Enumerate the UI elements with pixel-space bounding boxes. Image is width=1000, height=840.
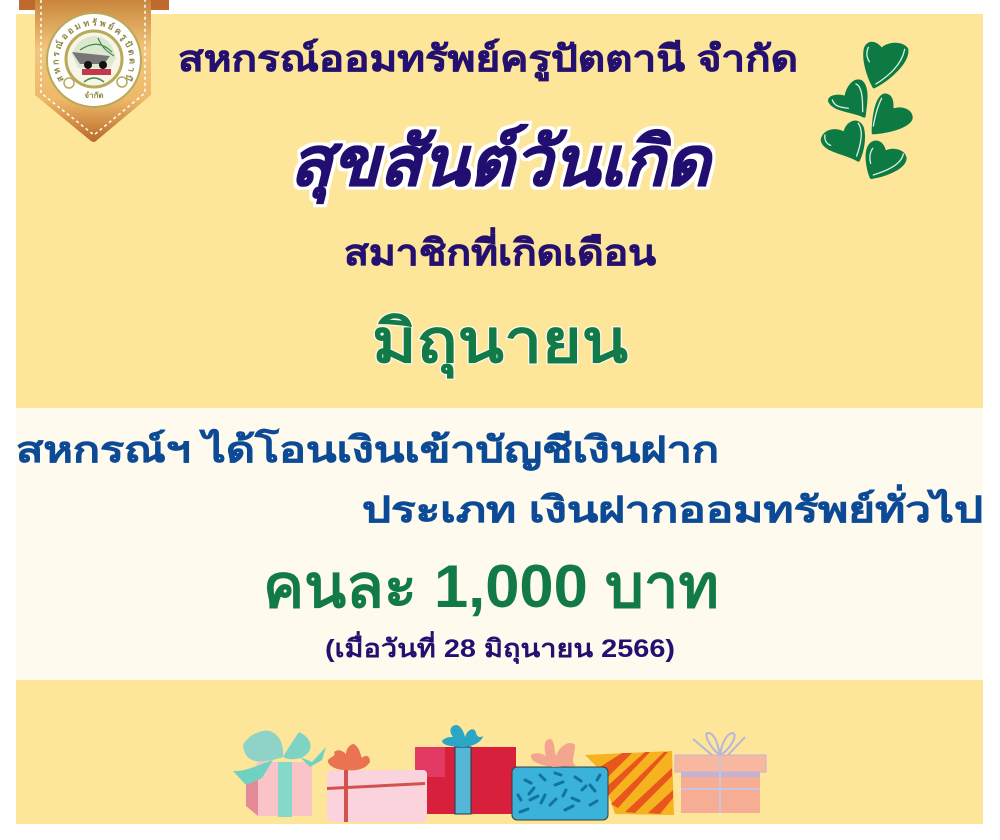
panel: bottom yellow band	[16, 680, 983, 824]
icon: light pink gift with red ribbon	[327, 744, 427, 822]
text: amount: คนละ 1,000 บาท	[263, 553, 719, 620]
icon: blue patterned gift	[512, 739, 608, 820]
icon: red gift with blue ribbon	[415, 725, 516, 814]
text: date: (เมื่อวันที่ 28 มิถุนายน 2566)	[325, 631, 675, 665]
title: happy birthday: สุขสันต์วันเกิด	[290, 124, 714, 204]
text: transfer line 1: สหกรณ์ฯ ได้โอนเงินเข้าบัญชีเงินฝาก	[16, 428, 719, 471]
icon: pink gift with teal bow	[233, 731, 326, 817]
icon: cooperative logo ribbon: สหกรณ์ออมทรัพย์ครูปัตตานี	[53, 18, 135, 82]
panel: message band	[16, 408, 983, 680]
heading: cooperative name: สหกรณ์ออมทรัพย์ครูปัตตานี จำกัด	[178, 38, 798, 82]
icon: cooperative logo ribbon: จำกัด	[84, 91, 104, 100]
text: transfer line 2: ประเภท เงินฝากออมทรัพย์ทั่วไป	[362, 484, 983, 530]
panel: top yellow background	[16, 14, 983, 408]
icon: gift boxes	[233, 725, 766, 822]
heading: month: มิถุนายน	[372, 308, 628, 379]
icon: green hearts	[822, 43, 911, 177]
icon: cooperative logo ribbon	[19, 0, 169, 142]
heading: members born in: สมาชิกที่เกิดเดือน	[344, 227, 656, 273]
icon: orange striped gift	[585, 751, 674, 815]
icon: peach gift with lilac ribbon	[675, 733, 766, 813]
